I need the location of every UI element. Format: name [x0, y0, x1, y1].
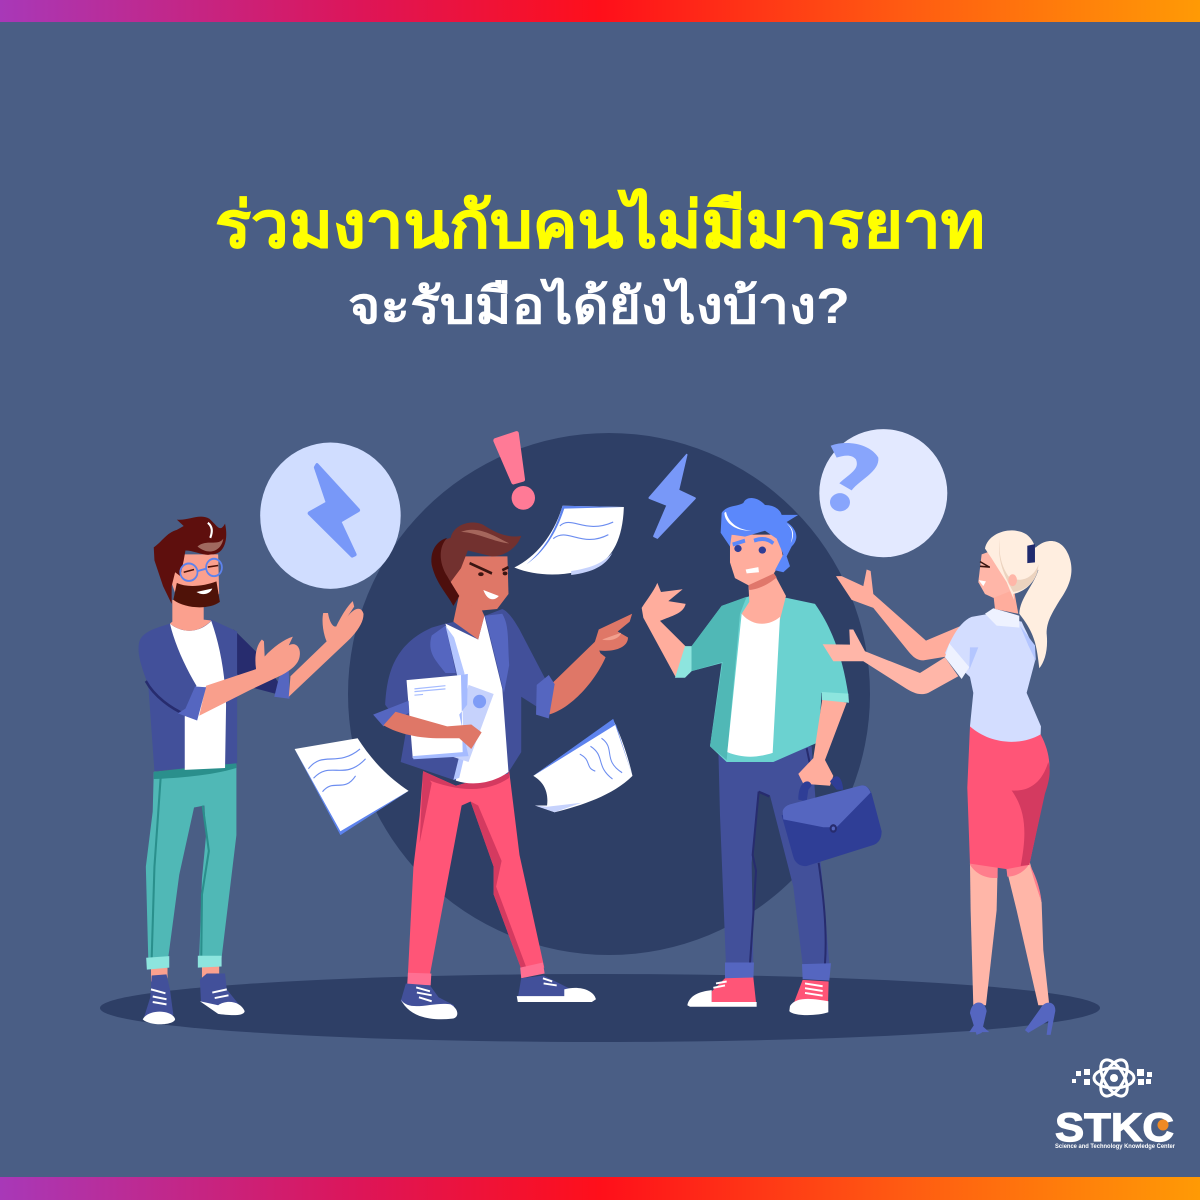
exclamation mark: [495, 433, 535, 510]
atom icon: [1094, 1056, 1134, 1100]
cuffs: [725, 962, 831, 981]
collar: [985, 608, 1019, 628]
right illustration group: [642, 429, 1071, 1035]
glasses: [180, 559, 222, 581]
ankles: [151, 966, 219, 981]
sleeve: [675, 646, 692, 678]
face: [978, 547, 1013, 598]
person 3: blue haired man: [642, 498, 882, 1015]
hair: [154, 517, 226, 604]
trousers: [718, 746, 829, 965]
white shirt: [445, 616, 508, 783]
teal trousers: [146, 765, 236, 958]
flying paper top: [514, 506, 624, 575]
hair: [721, 498, 798, 572]
shoes: [401, 983, 454, 1015]
skirt: [967, 726, 1049, 869]
person 1: bearded man: [139, 517, 364, 1024]
heels: [969, 1002, 989, 1035]
jacket: [692, 596, 848, 762]
pink trousers: [408, 771, 544, 974]
sleeves: [536, 675, 555, 719]
hair: [431, 523, 521, 606]
brows and mouth: [470, 563, 508, 573]
subtitle: จะรับมือได้ยังไงบ้าง?: [348, 277, 850, 334]
arm raised: [289, 601, 364, 697]
ponytail: [1019, 541, 1071, 668]
ground shadow: [100, 974, 1100, 1042]
neck: [170, 600, 211, 631]
neck: [453, 594, 484, 639]
beard: [173, 581, 220, 607]
shoes: [143, 974, 245, 1024]
pointing hand: [593, 614, 632, 651]
title: [215, 188, 985, 334]
neck: [993, 586, 1018, 614]
shirt: [727, 614, 780, 757]
left illustration group: [139, 433, 632, 1024]
face: [451, 556, 508, 611]
red shoes: [712, 978, 756, 1002]
paper behind folder: [451, 685, 494, 762]
hair clip: [1027, 544, 1035, 563]
arm front: [199, 637, 300, 716]
cuffs: [146, 956, 222, 970]
neck: [742, 572, 786, 625]
back sleeve: [234, 630, 280, 694]
folder: [407, 675, 464, 758]
left arm: [383, 712, 482, 749]
title: ร่วมงานกับคนไม่มีมารยาท: [215, 188, 985, 261]
pixel squares: [1072, 1069, 1152, 1085]
face: [730, 535, 783, 586]
legs: [970, 863, 998, 1005]
briefcase: [782, 776, 882, 866]
background circle: [348, 433, 870, 955]
sleeve cuff: [178, 686, 206, 721]
speech bubble: lightning: [260, 443, 401, 589]
jacket: [139, 620, 237, 771]
cuffs: [407, 962, 545, 985]
flying paper right: [533, 719, 632, 812]
front arm: [823, 630, 958, 694]
right arm: [549, 641, 606, 715]
logo: [1055, 1056, 1176, 1150]
face: [170, 554, 219, 606]
speech bubble: question: [819, 429, 947, 557]
back arm: [836, 569, 967, 660]
hair: [985, 530, 1038, 600]
blouse: [945, 615, 1041, 742]
top gradient bar: [0, 0, 1200, 22]
person 4: blonde woman: [823, 530, 1071, 1035]
bottom gradient bar: [0, 1177, 1200, 1200]
flying paper left: [295, 738, 409, 835]
sleeve cuff: [945, 643, 969, 679]
lightning icon: [649, 455, 695, 538]
brows eyes mouth: [733, 539, 773, 545]
person 2: man with folder: [373, 523, 632, 1019]
raised arm: [642, 583, 690, 678]
right arm: [798, 697, 847, 786]
jacket: [385, 609, 546, 781]
logo tagline: Science and Technology Knowledge Center: [1055, 1144, 1176, 1150]
STKC wordmark: STKC: [1055, 1106, 1174, 1150]
white shirt: [170, 621, 226, 770]
